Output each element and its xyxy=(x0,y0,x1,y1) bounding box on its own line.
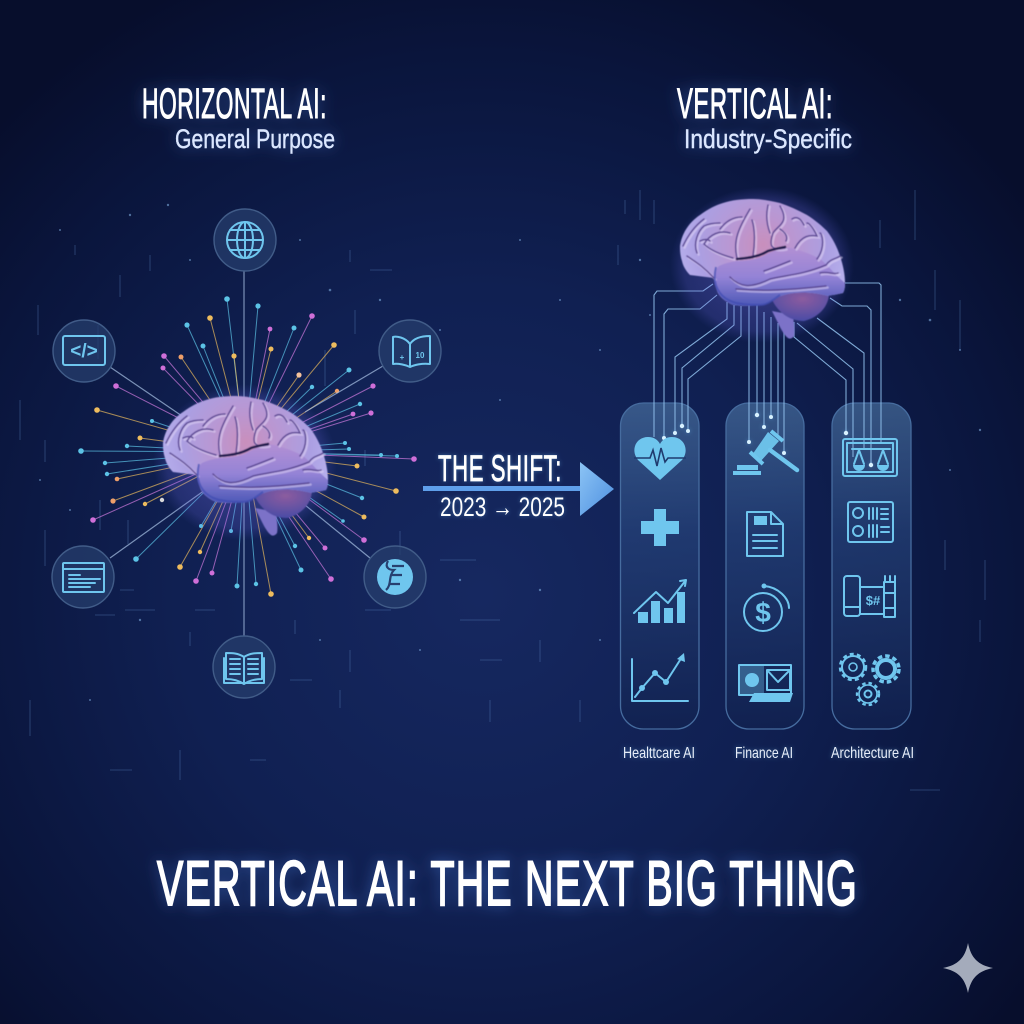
brain: right industry-specific xyxy=(670,187,854,343)
label: finance: Finance AI xyxy=(735,745,793,762)
icon: open book right: 10 xyxy=(416,351,425,360)
icon: open book bottom xyxy=(213,636,275,698)
label: architecture: Architecture AI xyxy=(831,745,914,762)
heading: vertical AI: VERTICAL AI: xyxy=(677,80,833,128)
icon: line chart xyxy=(632,653,688,701)
icon: blueprint roll: $# xyxy=(866,593,881,608)
years text: 2023 → 2025 xyxy=(440,492,565,522)
icon: document grid xyxy=(848,502,893,542)
icon: code: </> xyxy=(70,341,98,362)
label: healthcare: Healttcare AI xyxy=(623,745,695,762)
left title xyxy=(142,80,335,154)
icon: laptop dashboard xyxy=(739,665,793,702)
icon: dollar coin: $ xyxy=(755,597,771,628)
icon: heart with pulse xyxy=(634,437,686,480)
brain: left general-purpose xyxy=(153,384,337,540)
icon: open book right: + xyxy=(400,353,405,362)
icon: browser window xyxy=(52,546,114,608)
shift label and arrow xyxy=(423,448,614,522)
wires from right brain to columns xyxy=(654,283,881,467)
icon: gears xyxy=(840,654,899,705)
icon: globe xyxy=(214,209,276,271)
panel: finance column xyxy=(726,403,804,729)
icon: document xyxy=(747,512,783,556)
icon: code xyxy=(53,320,115,382)
icon: dollar coin xyxy=(744,584,789,631)
panel: healthcare column xyxy=(620,403,699,729)
icon: open book right xyxy=(379,320,441,382)
arrow xyxy=(423,462,614,516)
panel: architecture column xyxy=(832,403,911,729)
column labels xyxy=(623,745,914,762)
icon: bar chart rising xyxy=(634,580,686,623)
icon: sparkle watermark xyxy=(943,943,993,993)
icon: filled globe xyxy=(364,546,426,608)
icon: blueprint roll xyxy=(844,576,895,617)
icon: scales xyxy=(843,439,897,476)
subheading: industry-specific: Industry-Specific xyxy=(684,124,852,154)
shift text: THE SHIFT: xyxy=(438,448,562,489)
right title xyxy=(677,80,852,154)
icon: medical cross xyxy=(641,509,679,546)
icon: gavel xyxy=(733,431,797,475)
subheading: general purpose: General Purpose xyxy=(175,124,335,154)
connectors to satellite icons xyxy=(110,271,383,636)
heading: horizontal AI: HORIZONTAL AI: xyxy=(142,80,327,128)
radial rays from left brain xyxy=(78,296,417,597)
